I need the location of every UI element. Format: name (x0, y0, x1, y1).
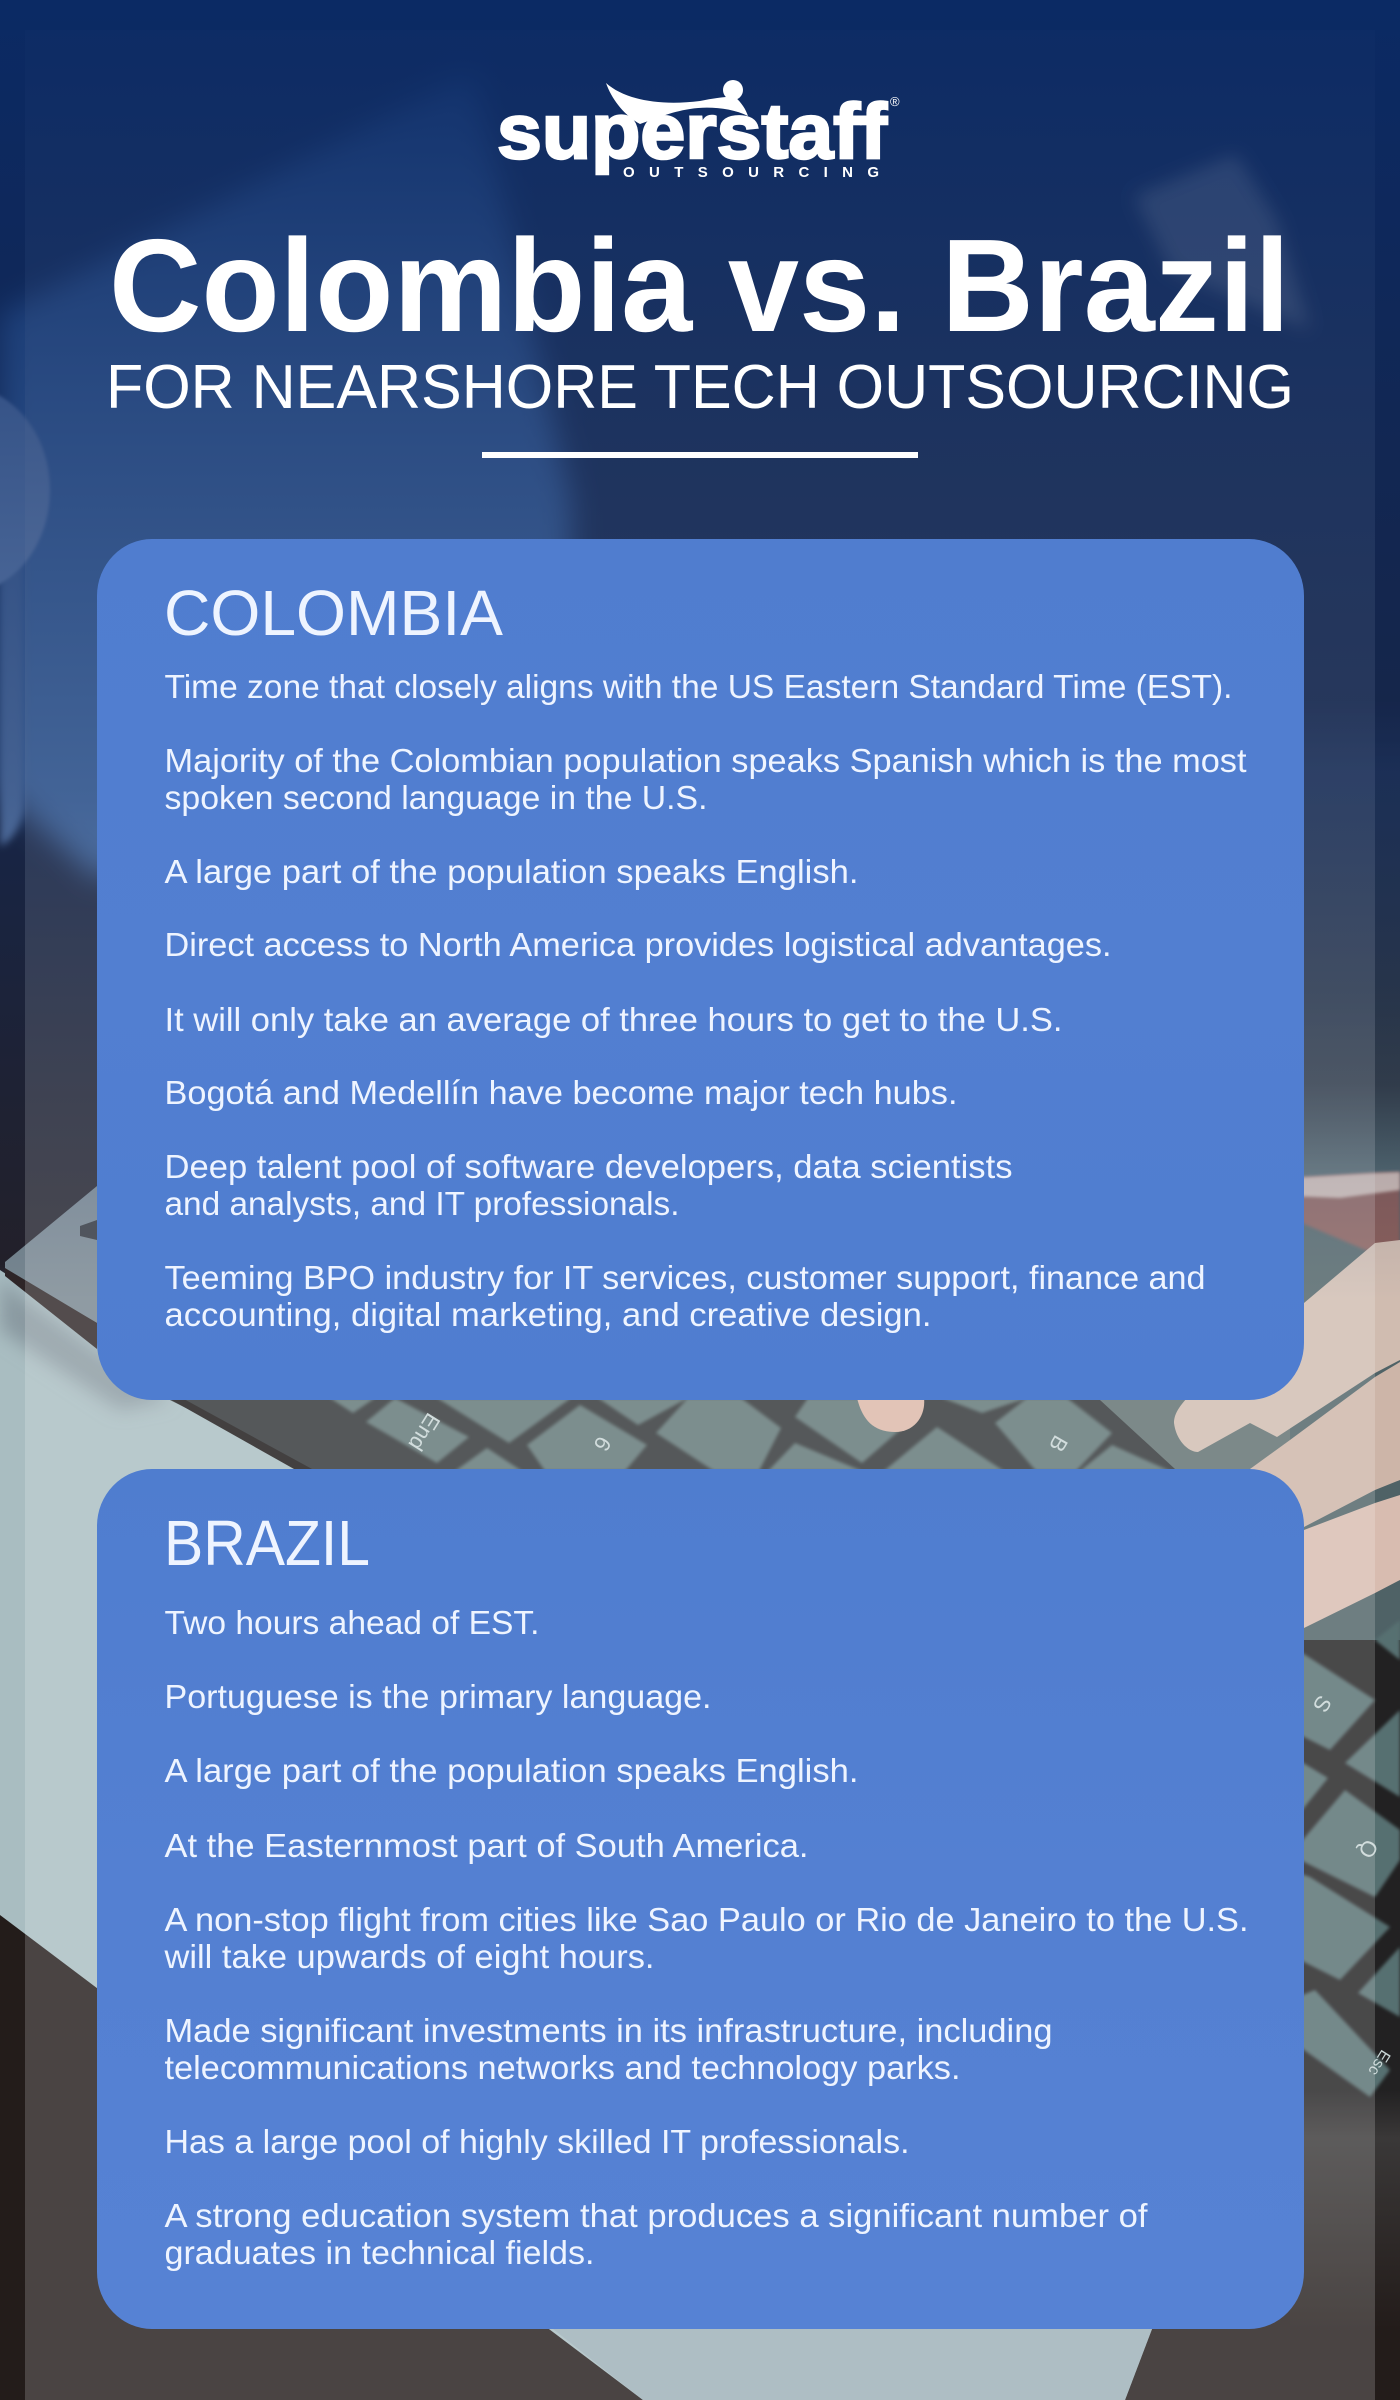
Brazil points: Two hours ahead of EST. (164, 1604, 540, 1641)
Colombia points: Time zone that closely aligns with the US Eastern Standard Time (EST). (164, 668, 1232, 705)
title: Colombia vs. Brazil (109, 212, 1290, 359)
background photo: laptop and hands: Esc (1365, 2047, 1393, 2078)
background photo: laptop and hands: B (1044, 1431, 1073, 1456)
Brazil points: Portuguese is the primary language. (164, 1678, 712, 1715)
background photo: laptop and hands: Q (1353, 1835, 1383, 1863)
Colombia points: A large part of the population speaks English. (164, 853, 858, 890)
Colombia points: accounting, digital marketing, and creative design. (164, 1296, 932, 1333)
Brazil points (163, 1604, 1248, 2271)
Brazil points: At the Easternmost part of South America. (164, 1827, 808, 1864)
Colombia heading: COLOMBIA (164, 577, 503, 649)
Colombia points: Majority of the Colombian population speaks Spanish which is the most (164, 742, 1246, 779)
keyboard right side (1290, 1620, 1400, 2090)
Brazil points: will take upwards of eight hours. (163, 1938, 654, 1975)
Brazil points: Has a large pool of highly skilled IT professionals. (164, 2123, 910, 2160)
Colombia points: spoken second language in the U.S. (164, 779, 708, 816)
keyboard lip (5, 1186, 97, 1323)
keyboard strip between panels (170, 1400, 1290, 1469)
title divider (482, 452, 918, 458)
laptop body (0, 1270, 1152, 2400)
Colombia points: It will only take an average of three hours to get to the U.S. (164, 1001, 1062, 1038)
coffee cup (0, 560, 24, 846)
subtitle: FOR NEARSHORE TECH OUTSOURCING (106, 353, 1294, 422)
Brazil points: telecommunications networks and technology parks. (164, 2049, 960, 2086)
logo tagline: OUTSOURCING (623, 164, 879, 181)
Colombia points: Bogotá and Medellín have become major tech hubs. (164, 1074, 958, 1111)
Colombia points: Deep talent pool of software developers, data scientists (164, 1148, 1012, 1185)
Colombia points (164, 668, 1246, 1333)
Brazil points: A large part of the population speaks English. (164, 1752, 858, 1789)
logo swoosh (606, 83, 748, 124)
hand fingers (1290, 1172, 1400, 1260)
Brazil points: Made significant investments in its infrastructure, including (164, 2012, 1052, 2049)
background photo: laptop and hands: S (1308, 1691, 1337, 1717)
registered mark: ® (890, 94, 900, 109)
logo wordmark: superstaff (497, 87, 888, 175)
logo figure head (723, 80, 743, 100)
screen highlight (1134, 154, 1310, 330)
background photo: laptop and hands: 6 (589, 1432, 616, 1455)
Brazil points: A strong education system that produces a significant number of (164, 2197, 1148, 2234)
panel: Brazil (97, 1469, 1304, 2329)
logo: Superstaff Outsourcing (497, 80, 900, 181)
Brazil points: graduates in technical fields. (164, 2234, 594, 2271)
Colombia points: Teeming BPO industry for IT services, customer support, finance and (164, 1259, 1206, 1296)
background photo: laptop and hands: End (403, 1409, 445, 1455)
Colombia points: and analysts, and IT professionals. (164, 1185, 680, 1222)
Colombia points: Direct access to North America provides logistical advantages. (164, 926, 1112, 963)
Brazil points: A non-stop flight from cities like Sao Paulo or Rio de Janeiro to the U.S. (164, 1901, 1248, 1938)
panel: Colombia (97, 539, 1304, 1400)
Brazil heading: BRAZIL (164, 1507, 370, 1579)
